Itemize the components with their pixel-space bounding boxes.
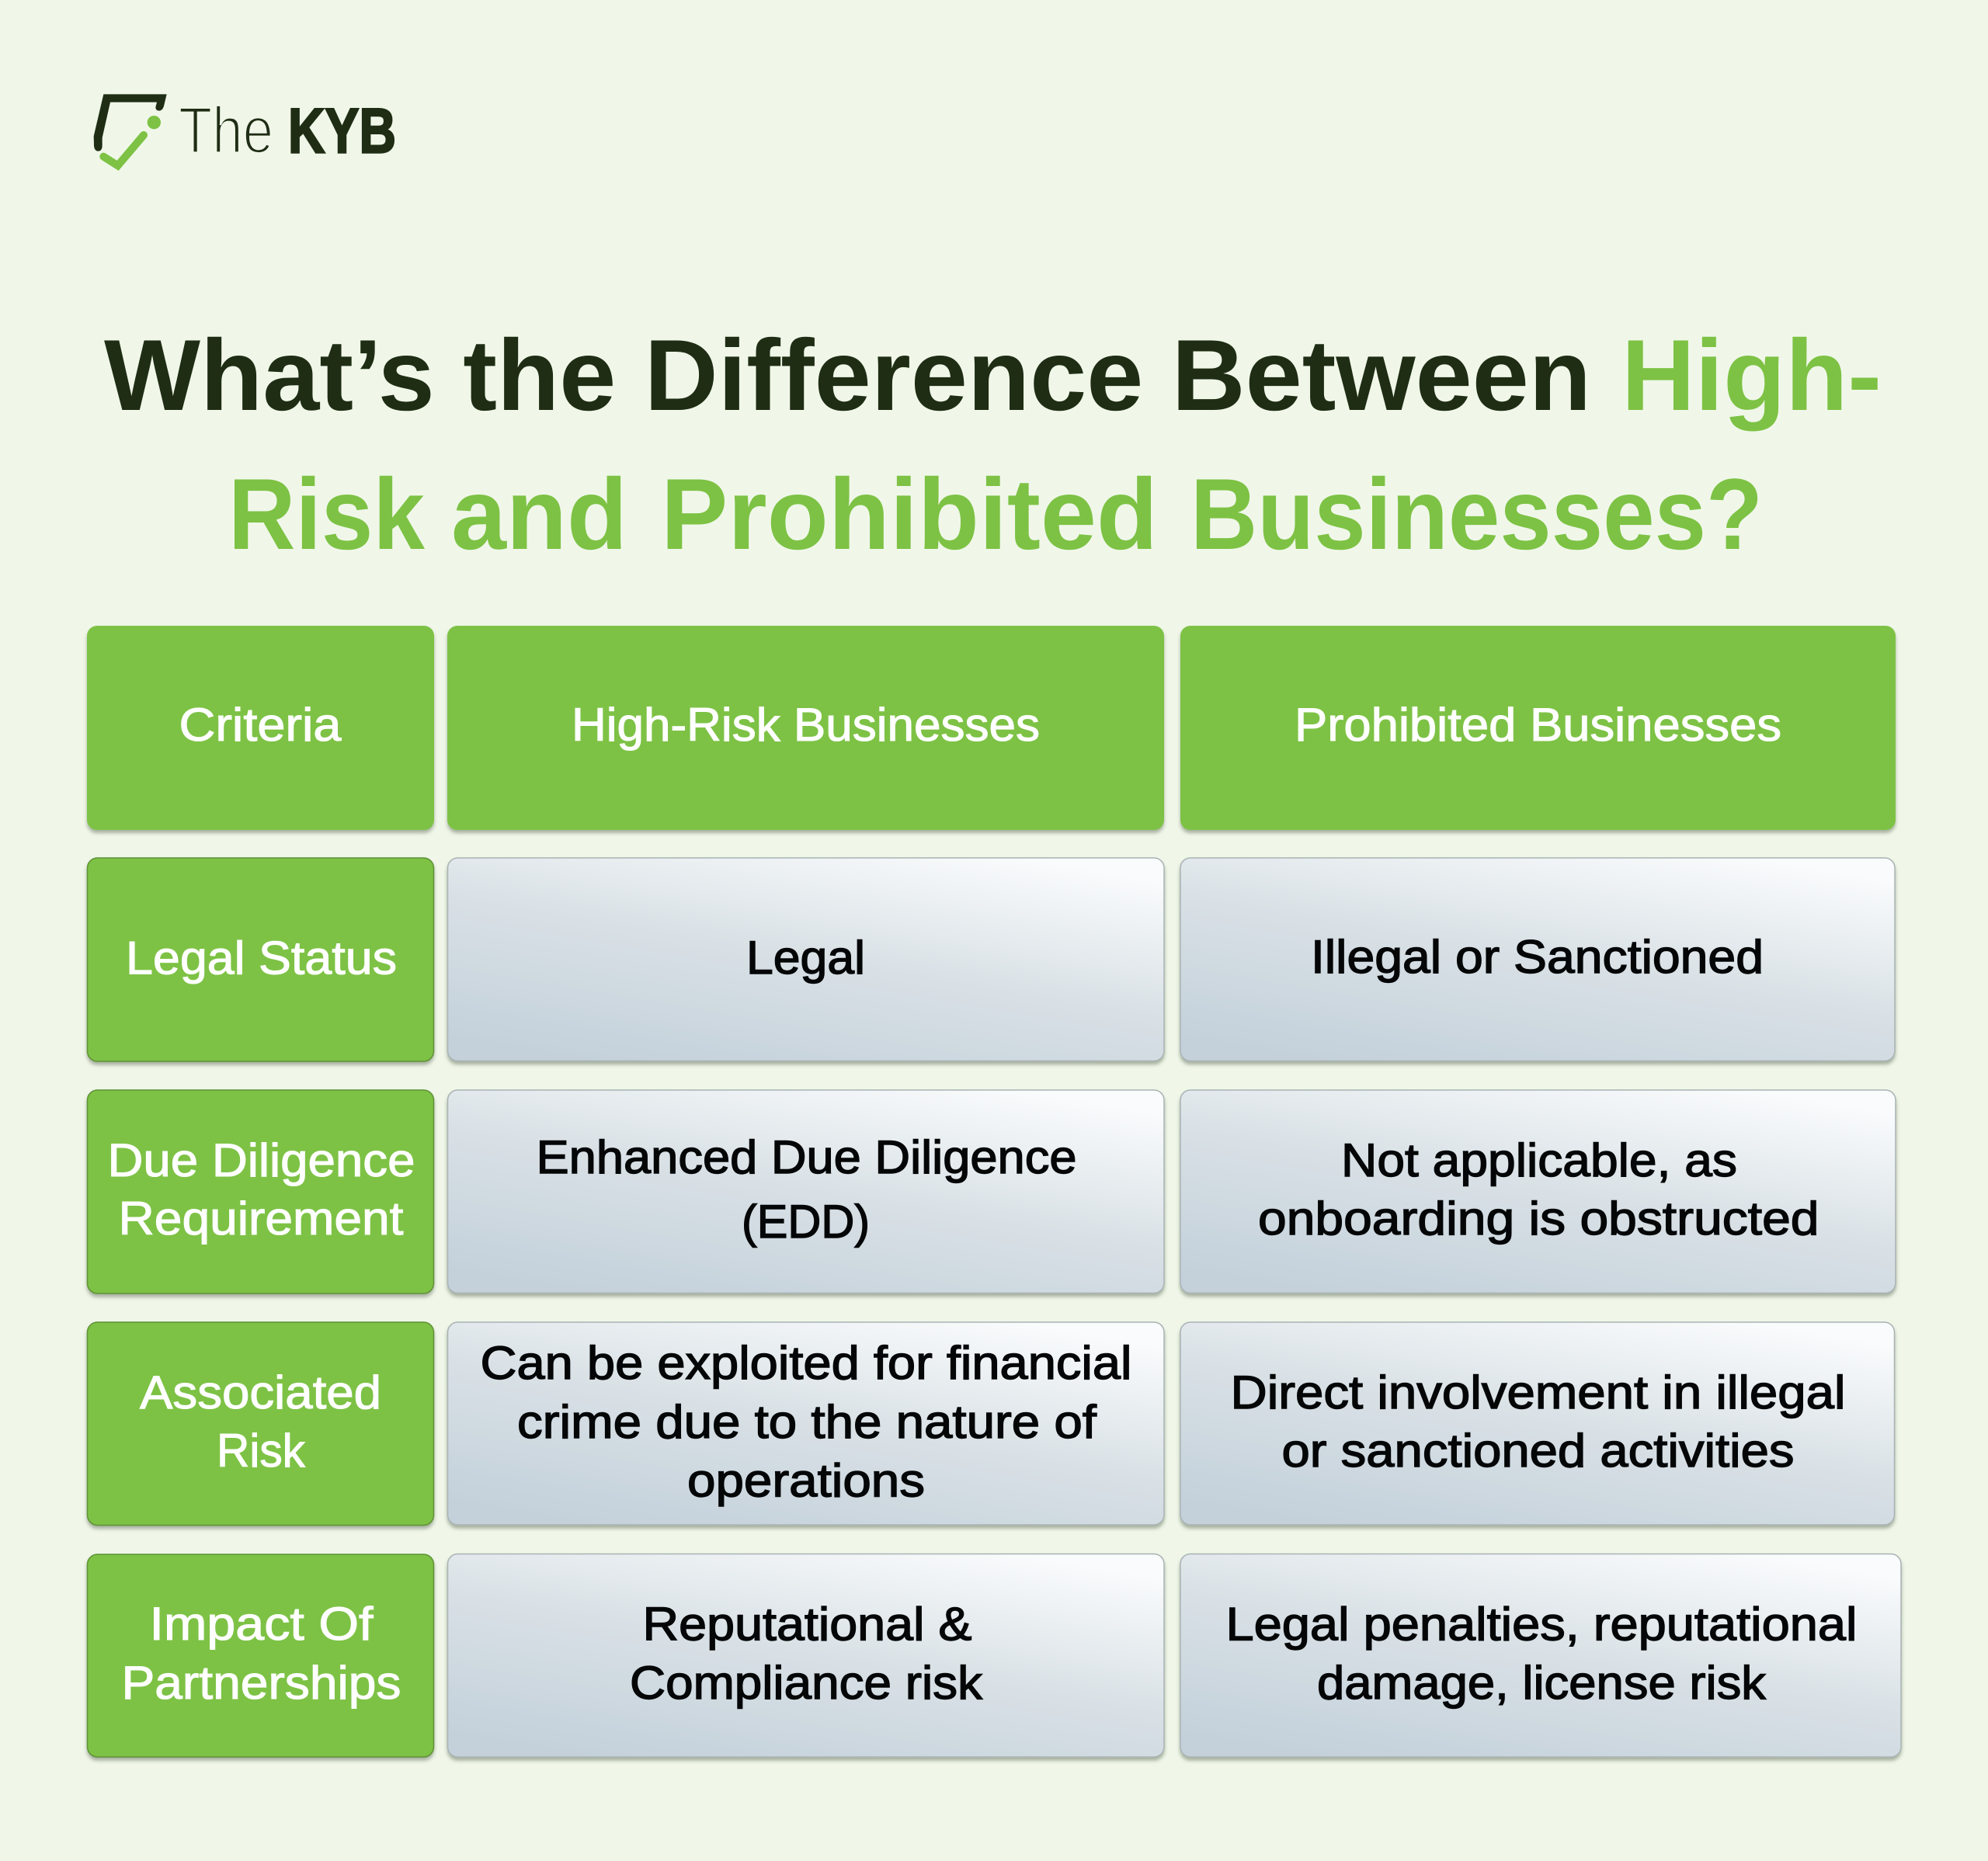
cell: prohibited impact bbox=[1180, 1554, 1901, 1757]
logo wordmark: KYB bbox=[288, 96, 396, 166]
cell: high-risk legal status bbox=[447, 858, 1164, 1061]
cell: prohibited legal status: Illegal or Sanctioned bbox=[1311, 931, 1764, 983]
cell: high-risk due diligence: Enhanced Due Diligence bbox=[536, 1131, 1076, 1183]
cell: prohibited associated risk bbox=[1180, 1322, 1895, 1525]
title: What’s the Difference Between bbox=[104, 318, 1591, 432]
cell: prohibited impact: Legal penalties, reputational bbox=[1225, 1598, 1858, 1651]
row label: Impact Of Partnerships: Partnerships bbox=[121, 1657, 401, 1709]
cell: prohibited associated risk: Direct involvement in illegal bbox=[1230, 1366, 1845, 1418]
row label: Impact Of Partnerships bbox=[87, 1554, 433, 1757]
cell: high-risk impact: Compliance risk bbox=[630, 1657, 983, 1709]
cell: prohibited due diligence bbox=[1180, 1090, 1896, 1293]
cell: high-risk associated risk bbox=[447, 1322, 1164, 1525]
cell: high-risk legal status: Legal bbox=[746, 932, 865, 984]
title: Risk bbox=[228, 457, 426, 571]
header: Prohibited Businesses bbox=[1180, 626, 1896, 830]
row label: Due Diligence Requirement: Due Diligence bbox=[107, 1134, 415, 1186]
title: and bbox=[451, 457, 627, 571]
header: High-Risk Businesses: High-Risk Businesses bbox=[572, 699, 1040, 751]
cell: prohibited associated risk: or sanctioned activities bbox=[1281, 1425, 1794, 1477]
cell: high-risk impact: Reputational & bbox=[643, 1598, 972, 1651]
cell: high-risk associated risk: crime due to the nature of bbox=[517, 1396, 1097, 1448]
row label: Due Diligence Requirement bbox=[87, 1090, 433, 1293]
row label: Impact Of Partnerships: Impact Of bbox=[149, 1598, 374, 1650]
title: Businesses? bbox=[1190, 457, 1763, 571]
row label: Due Diligence Requirement: Requirement bbox=[118, 1193, 404, 1245]
row label: Legal Status bbox=[87, 858, 433, 1061]
header: Criteria bbox=[87, 626, 434, 830]
cell: prohibited legal status bbox=[1180, 858, 1895, 1061]
header: High-Risk Businesses bbox=[447, 626, 1164, 830]
title: High- bbox=[1621, 318, 1882, 432]
cell: high-risk associated risk: Can be exploited for financial bbox=[480, 1337, 1132, 1389]
row label: Associated Risk: Associated bbox=[140, 1366, 381, 1418]
cell: high-risk due diligence bbox=[447, 1090, 1164, 1293]
title: Prohibited bbox=[661, 457, 1158, 571]
cell: high-risk due diligence: (EDD) bbox=[742, 1196, 870, 1248]
logo: The KYB bbox=[94, 93, 396, 166]
comparison table bbox=[87, 626, 1901, 1757]
row label: Associated Risk: Risk bbox=[217, 1425, 306, 1477]
title bbox=[104, 318, 1882, 571]
logo wordmark bbox=[179, 93, 396, 166]
row label: Associated Risk bbox=[87, 1322, 433, 1525]
cell: high-risk impact bbox=[447, 1554, 1164, 1757]
icon: shield check bbox=[94, 94, 167, 165]
header: Criteria: Criteria bbox=[179, 699, 342, 751]
logo wordmark: The bbox=[179, 93, 273, 166]
cell: prohibited due diligence: onboarding is obstructed bbox=[1258, 1193, 1819, 1245]
cell: high-risk associated risk: operations bbox=[687, 1455, 925, 1506]
cell: prohibited due diligence: Not applicable, as bbox=[1341, 1134, 1737, 1186]
header: Prohibited Businesses: Prohibited Businesses bbox=[1295, 699, 1781, 751]
cell: prohibited impact: damage, license risk bbox=[1317, 1657, 1767, 1709]
row label: Legal Status: Legal Status bbox=[126, 932, 397, 984]
